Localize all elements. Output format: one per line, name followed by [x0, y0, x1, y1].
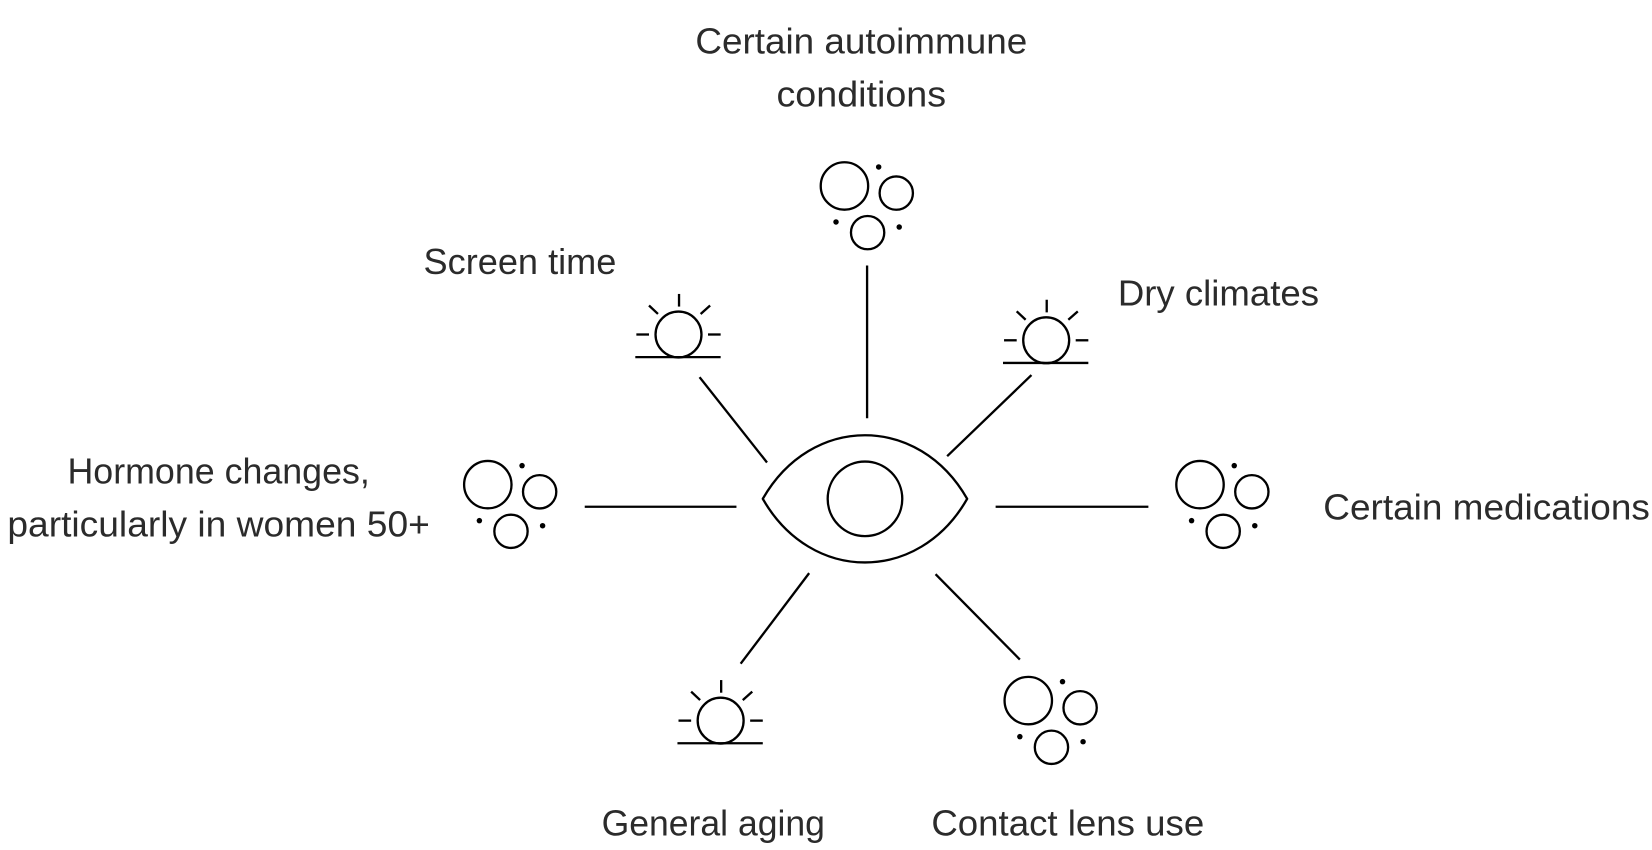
- icon: bubbles hormone: [464, 461, 556, 548]
- connector: lower left: [741, 573, 809, 664]
- label: hormone changes: [7, 452, 430, 544]
- connector: left: [585, 506, 736, 508]
- label: screen time: Screen time: [424, 242, 616, 282]
- label: contact lens use: Contact lens use: [931, 803, 1204, 843]
- connector: upper left: [700, 377, 767, 463]
- connector: right: [996, 506, 1148, 508]
- icon: sun screen time: [635, 294, 721, 357]
- label: hormone changes: Hormone changes,: [67, 452, 370, 492]
- connector: upper right: [947, 375, 1031, 456]
- icon: central eye: [763, 435, 967, 562]
- icon: bubbles contact lens: [1005, 677, 1097, 764]
- icon: sun general aging: [677, 680, 763, 744]
- label: certain autoimmune conditions: [695, 22, 1027, 114]
- icon: bubbles medications: [1176, 461, 1268, 548]
- label: hormone changes: particularly in women 50+: [7, 504, 430, 544]
- label: certain autoimmune conditions: conditions: [776, 74, 946, 114]
- icon: bubbles top: [821, 162, 913, 249]
- connector: lower right: [936, 574, 1020, 660]
- label: certain autoimmune conditions: Certain autoimmune: [695, 22, 1027, 62]
- icon: sun dry climates: [1003, 300, 1088, 363]
- connector: top: [866, 265, 868, 418]
- label: dry climates: Dry climates: [1118, 274, 1319, 314]
- label: certain medications: Certain medications: [1323, 487, 1650, 527]
- label: general aging: General aging: [602, 803, 825, 843]
